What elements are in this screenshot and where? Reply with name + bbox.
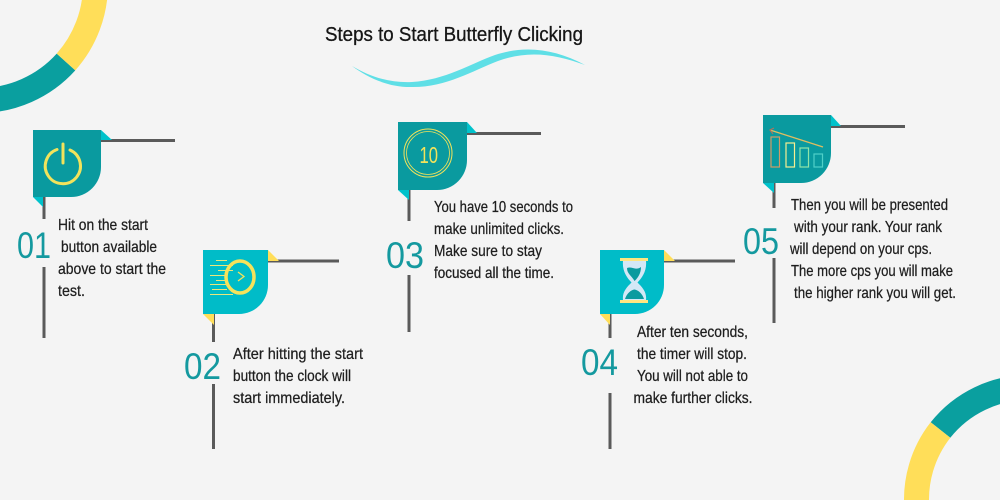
icon card [763, 115, 841, 193]
step 01 [17, 130, 175, 338]
text: step 02 [233, 346, 363, 407]
text: step 05: Then you will be presented [791, 197, 948, 214]
decorative arc: top left [0, 0, 96, 101]
text: step 02: After hitting the start [233, 346, 363, 363]
icon card [203, 250, 279, 325]
text: step 01: Hit on the start [58, 217, 148, 234]
icon: 10 second timer: 10 [420, 142, 438, 168]
text: step 03: You have 10 seconds to [434, 199, 573, 216]
connector lines [409, 134, 541, 332]
text: step 01 [58, 217, 166, 300]
text: step 01: test. [58, 283, 85, 300]
text: step 04: You will not able to [637, 368, 748, 385]
step 05 [743, 115, 956, 323]
text: step 04 [634, 324, 752, 407]
icon: power button [45, 144, 80, 184]
text: step 03 [434, 199, 573, 282]
number 04: 04 [581, 342, 618, 383]
title swoosh [352, 50, 585, 87]
text: step 05: The more cps you will make [791, 263, 953, 280]
text: step 01: button available [61, 239, 157, 256]
text: step 05: the higher rank you will get. [794, 285, 956, 302]
icon card [600, 250, 675, 325]
text: step 02: start immediately. [233, 390, 345, 407]
icon: hourglass [620, 258, 648, 303]
step 04 [581, 250, 752, 449]
connector lines [774, 126, 905, 323]
number 03: 03 [386, 235, 424, 276]
text: step 05: will depend on your cps. [789, 241, 932, 258]
text: step 01: above to start the [58, 261, 166, 278]
title: Steps to Start Butterfly Clicking [325, 23, 583, 46]
text: step 05: with your rank. Your rank [793, 219, 943, 236]
icon: fast clock [210, 260, 254, 294]
icon: ranking bar chart [770, 128, 823, 167]
number 01: 01 [17, 225, 51, 266]
text: step 03: Make sure to stay [434, 243, 542, 260]
connector lines [44, 140, 175, 338]
text: step 02: button the clock will [233, 368, 351, 385]
step 02 [184, 250, 363, 449]
step 03 [386, 122, 573, 332]
icon card [398, 122, 477, 200]
text: step 04: After ten seconds, [637, 324, 748, 341]
icon card [33, 130, 112, 207]
text: step 03: make unlimited clicks. [434, 221, 564, 238]
text: step 04: make further clicks. [634, 390, 752, 407]
number 05: 05 [743, 221, 779, 262]
text: step 04: the timer will stop. [637, 346, 747, 363]
number 02: 02 [184, 346, 221, 387]
connector lines [610, 261, 735, 449]
connector lines [214, 261, 339, 449]
text: step 05 [789, 197, 956, 302]
icon: 10 second timer [404, 129, 452, 177]
decorative arc: bottom right [917, 387, 1000, 500]
text: step 03: focused all the time. [434, 265, 554, 282]
